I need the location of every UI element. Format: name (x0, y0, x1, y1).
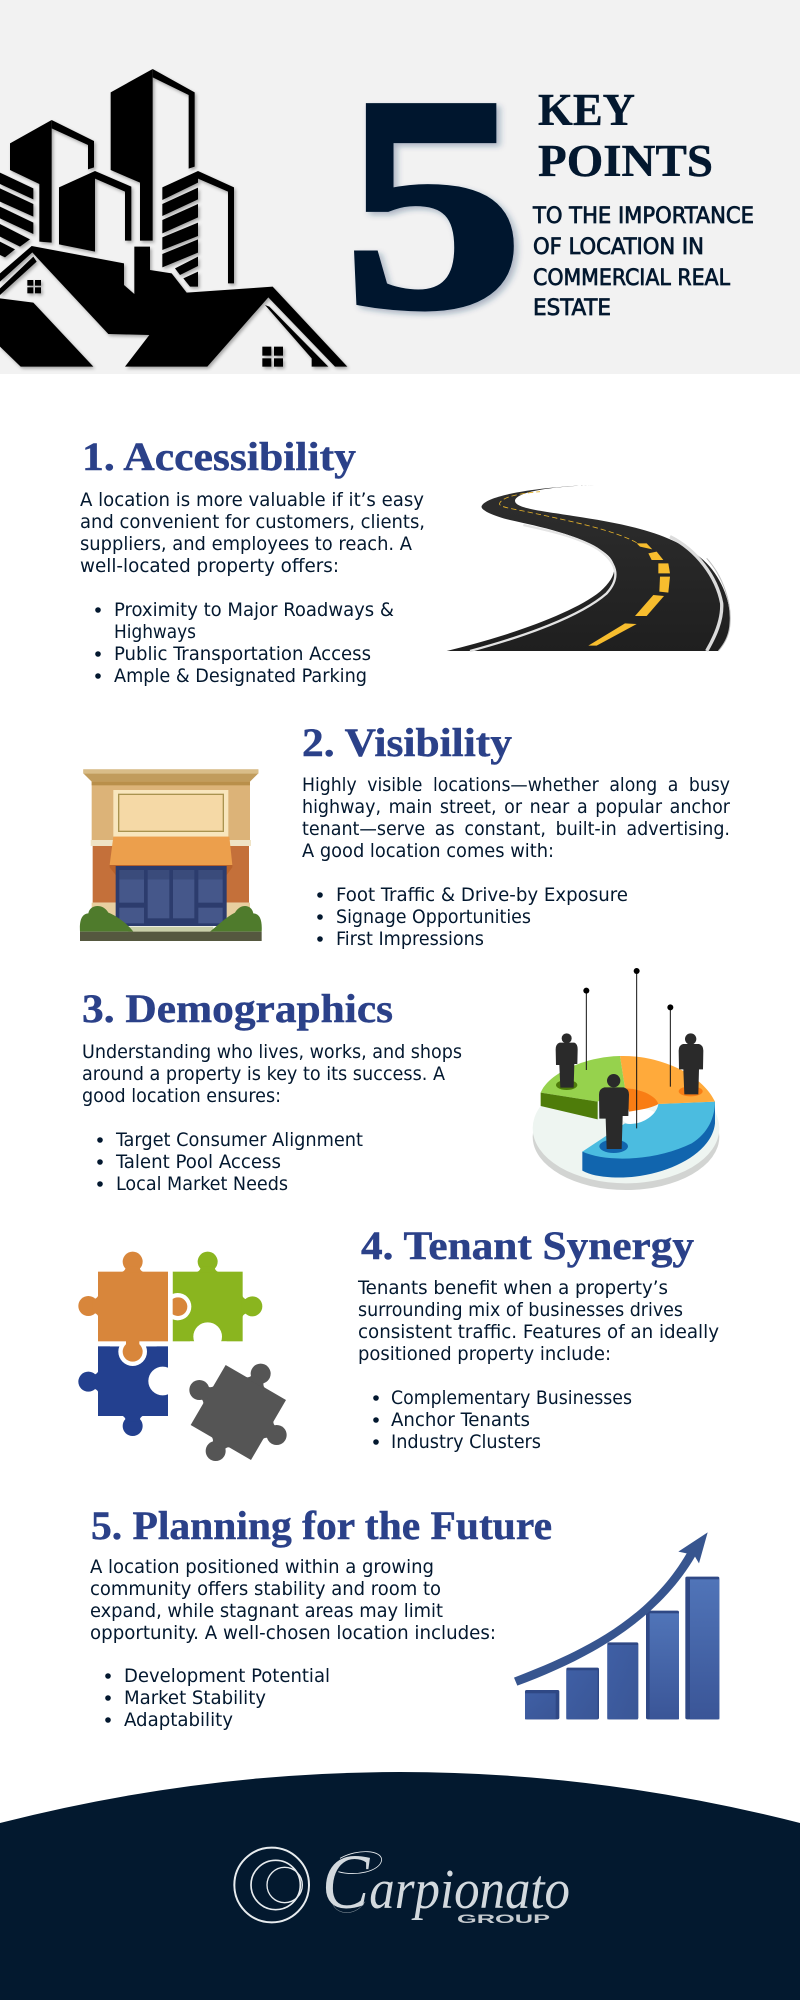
panel: footer (0, 1772, 800, 2000)
body text: Highly visible locations—whether along a busy (302, 775, 730, 796)
panel: 5 planning for the future (90, 1503, 719, 1731)
panel: 1 accessibility (80, 434, 730, 687)
panel: header (0, 0, 800, 374)
bullet list (97, 1130, 363, 1195)
bullet list: Target Consumer Alignment (115, 1130, 363, 1151)
body text (357, 1278, 719, 1365)
heading: 1. Accessibility (82, 434, 356, 479)
bullet list: Foot Traffic & Drive-by Exposure (336, 885, 628, 906)
icon: storefront (80, 769, 262, 941)
bullet list: Adaptability (124, 1710, 233, 1731)
bullet list: Market Stability (124, 1688, 266, 1709)
bullet list: Ample & Designated Parking (114, 666, 367, 687)
icon: rising bar chart with arrow (514, 1532, 719, 1719)
subtitle: ESTATE (533, 296, 611, 321)
panel: 4 tenant synergy (78, 1223, 719, 1461)
body text: and convenient for customers, clients, (80, 512, 425, 533)
body text: consistent traffic. Features of an ideally (358, 1322, 719, 1343)
body text (90, 1557, 496, 1644)
heading: 3. Demographics (82, 986, 393, 1031)
title: key points (538, 85, 713, 186)
body text: well-located property offers: (80, 556, 339, 577)
bullet list (105, 1666, 330, 1731)
body text: positioned property include: (358, 1344, 611, 1365)
heading: 5. Planning for the Future (91, 1503, 552, 1548)
panel: 3 demographics (82, 968, 719, 1195)
bullet list (95, 600, 394, 687)
logo rings (234, 1848, 382, 1922)
bullet list: Local Market Needs (116, 1174, 288, 1195)
bullet list: Proximity to Major Roadways & (114, 600, 394, 621)
body text (82, 1042, 462, 1107)
body text: tenant—serve as constant, built-in advertising. (302, 819, 730, 840)
panel: 2 visibility (80, 720, 730, 950)
logo: Carpionato Group (234, 1838, 570, 1926)
bullet list: Talent Pool Access (115, 1152, 281, 1173)
body text: Tenants benefit when a property’s (357, 1278, 668, 1299)
bullet list (373, 1388, 632, 1453)
big numeral 5: 5 (344, 35, 523, 371)
subtitle: COMMERCIAL REAL (533, 266, 730, 291)
bullet list: Signage Opportunities (336, 907, 531, 928)
bullet list: Anchor Tenants (391, 1410, 530, 1431)
bullet list: Public Transportation Access (114, 644, 371, 665)
body text: opportunity. A well-chosen location includes: (90, 1623, 496, 1644)
bullet list: Development Potential (124, 1666, 330, 1687)
body text (80, 490, 425, 577)
body text: surrounding mix of businesses drives (358, 1300, 683, 1321)
body text: good location ensures: (82, 1086, 281, 1107)
heading: 2. Visibility (302, 720, 512, 765)
icon: 3D pie chart with people (533, 968, 719, 1190)
icon: winding road (447, 485, 730, 651)
heading: 4. Tenant Synergy (361, 1223, 694, 1268)
title: key points: KEY (538, 85, 635, 135)
subtitle: OF LOCATION IN (533, 235, 704, 260)
body text: suppliers, and employees to reach. A (80, 534, 412, 555)
bullet list: Industry Clusters (391, 1432, 541, 1453)
body text: A location positioned within a growing (90, 1557, 434, 1578)
body text: community offers stability and room to (90, 1579, 441, 1600)
bullet list: Highways (114, 622, 196, 643)
footer curved band (0, 1772, 800, 2000)
bullet list (317, 885, 628, 950)
icon: puzzle pieces (78, 1252, 287, 1461)
body text: around a property is key to its success. A (82, 1064, 445, 1085)
bullet list: First Impressions (336, 929, 484, 950)
body text: expand, while stagnant areas may limit (90, 1601, 443, 1622)
body text (302, 775, 730, 862)
logo sub-wordmark: GROUP (457, 1912, 550, 1926)
body text: A location is more valuable if it’s easy (80, 490, 424, 511)
logo wordmark: Carpionato (322, 1838, 570, 1925)
bullet list: Complementary Businesses (391, 1388, 632, 1409)
subtitle: TO THE IMPORTANCE (532, 204, 754, 229)
body text: highway, main street, or near a popular anchor (302, 797, 730, 818)
icon: city buildings and houses (0, 69, 347, 367)
subtitle (532, 204, 754, 321)
body text: A good location comes with: (302, 841, 554, 862)
body text: Understanding who lives, works, and shops (82, 1042, 462, 1063)
title: key points: POINTS (538, 136, 713, 186)
